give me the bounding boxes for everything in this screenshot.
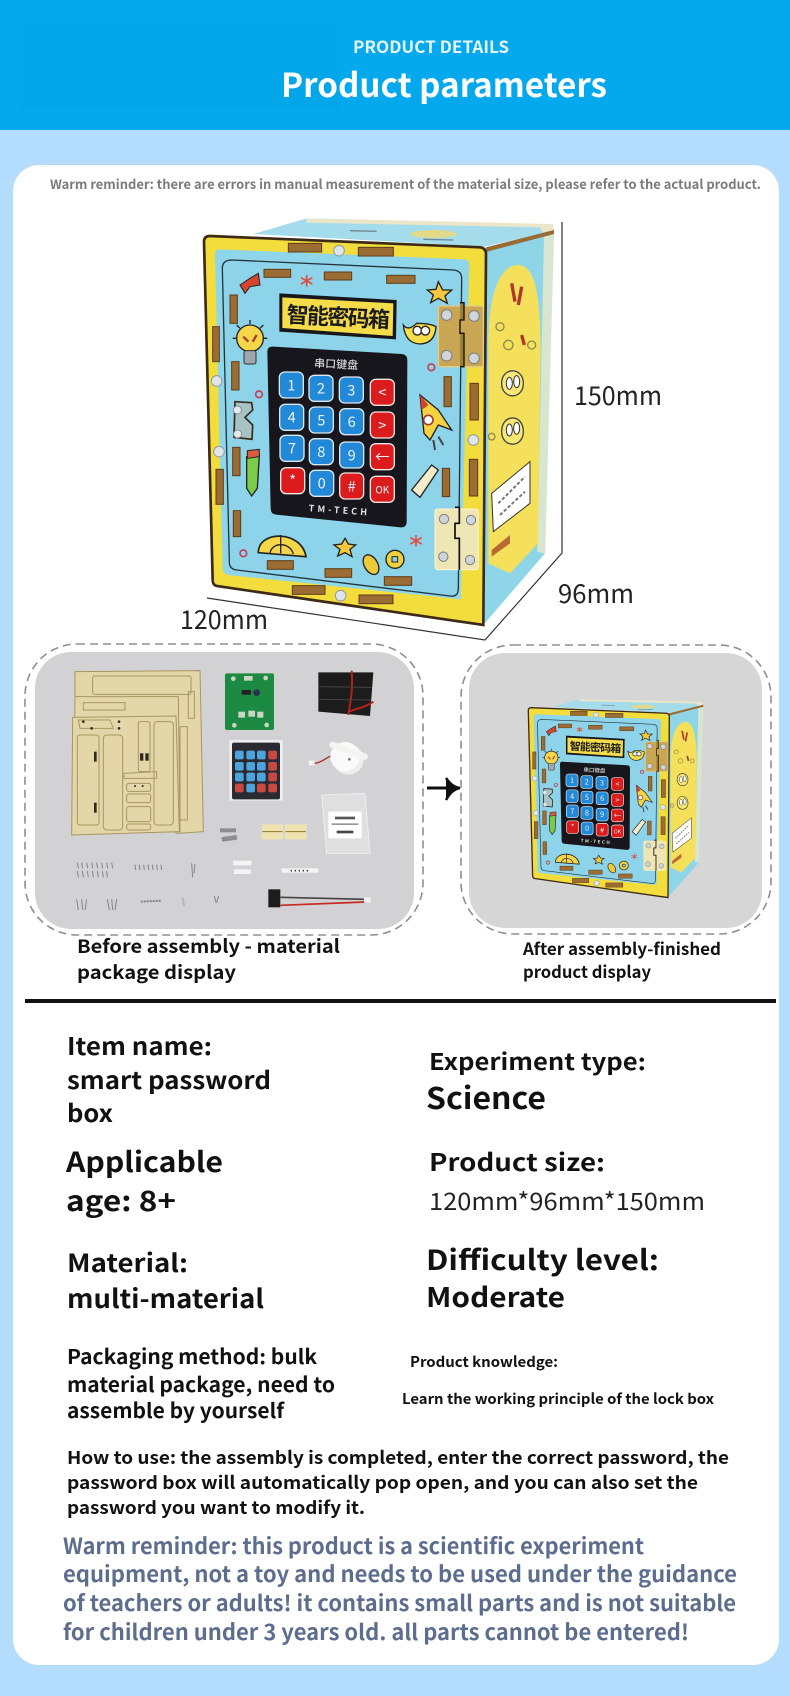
box illustration: 1 bbox=[287, 374, 295, 395]
box illustration: 9 bbox=[348, 444, 356, 465]
product photo: assembled password box with dimensions bbox=[180, 218, 662, 640]
kit parts bbox=[72, 671, 373, 910]
finished box: * bbox=[571, 823, 574, 833]
spec: product knowledge: Product knowledge: bbox=[410, 1351, 558, 1372]
finished box: 4 bbox=[570, 792, 574, 802]
finished box: 5 bbox=[585, 793, 589, 803]
caption: before assembly: Before assembly - material bbox=[77, 933, 340, 959]
spec: item name bbox=[67, 1027, 271, 1129]
warm reminder paragraph: equipment, not a toy and needs to be used under the guidance bbox=[63, 1557, 737, 1589]
width label: 120mm bbox=[180, 600, 268, 637]
micro switch and wires bbox=[268, 889, 280, 907]
warm reminder paragraph: Warm reminder: this product is a scientific experiment bbox=[63, 1529, 644, 1561]
mini keypad bbox=[229, 740, 283, 801]
spec: experiment type: Science bbox=[426, 1074, 546, 1118]
box illustration: OK bbox=[375, 481, 390, 496]
spec: difficulty level: Difficulty level: bbox=[426, 1239, 659, 1279]
finished box: 6 bbox=[600, 794, 604, 804]
spec: material: Material: bbox=[67, 1244, 188, 1280]
wooden boards bbox=[72, 671, 203, 835]
box illustration: 2 bbox=[317, 378, 325, 399]
panel: after assembly finished product photo bbox=[461, 645, 771, 934]
spec: applicable age: age: 8+ bbox=[66, 1180, 176, 1220]
finished box: 0 bbox=[585, 824, 589, 834]
dashed frame bbox=[461, 645, 771, 934]
header banner bbox=[0, 0, 790, 130]
spec: packaging method: Packaging method: bulk bbox=[67, 1340, 318, 1370]
spec: product size: Product size: bbox=[429, 1143, 605, 1178]
spec: experiment type: Experiment type: bbox=[429, 1043, 646, 1077]
spec: difficulty level: Moderate bbox=[426, 1276, 565, 1315]
box illustration: 3 bbox=[347, 379, 355, 400]
warm reminder paragraph: for children under 3 years old. all parts cannot be entered! bbox=[63, 1615, 689, 1647]
PCB board bbox=[225, 673, 274, 730]
box illustration: > bbox=[378, 414, 386, 435]
box illustration: 6 bbox=[348, 411, 356, 432]
spec: experiment type bbox=[426, 1043, 646, 1118]
caption: after assembly: After assembly-finished bbox=[522, 936, 721, 960]
depth label: 96mm bbox=[558, 574, 634, 611]
grey photo background bbox=[469, 653, 762, 928]
box illustration: < bbox=[378, 382, 386, 403]
screw bag bbox=[322, 793, 370, 853]
how to use paragraph bbox=[67, 1445, 729, 1520]
how to use paragraph: password box will automatically pop open, and you can also set the bbox=[67, 1470, 698, 1495]
section divider bbox=[25, 999, 776, 1003]
dashed frame bbox=[25, 644, 423, 935]
finished box: 8 bbox=[585, 809, 589, 819]
box illustration: 串口键盘 bbox=[314, 355, 359, 373]
box illustration bbox=[204, 218, 554, 625]
finished box: < bbox=[615, 780, 620, 790]
main title: Product parameters bbox=[281, 59, 607, 107]
spec: packaging method: material package, need to bbox=[67, 1368, 335, 1398]
spec: product size: 120mm*96mm*150mm bbox=[429, 1182, 705, 1217]
box illustration: 8 bbox=[317, 441, 325, 462]
box illustration: 0 bbox=[318, 473, 326, 494]
finished box: 智能密码箱 bbox=[569, 738, 622, 756]
finished box: ← bbox=[614, 811, 621, 821]
battery holder bbox=[318, 672, 373, 716]
box illustration: ← bbox=[375, 446, 390, 467]
warm reminder paragraph bbox=[63, 1529, 737, 1647]
finished box: 3 bbox=[600, 779, 604, 788]
finished box: # bbox=[600, 825, 604, 835]
finished box: > bbox=[615, 796, 620, 806]
height label: 150mm bbox=[574, 376, 662, 413]
box illustration: 智能密码箱 bbox=[286, 297, 391, 335]
box illustration: TM-TECH bbox=[308, 501, 367, 518]
spec: material bbox=[67, 1244, 264, 1316]
finished box: 9 bbox=[600, 810, 604, 820]
finished box: 串口键盘 bbox=[583, 766, 606, 775]
spec: applicable age bbox=[65, 1141, 223, 1220]
spec: packaging method bbox=[67, 1340, 335, 1424]
finished box: 2 bbox=[585, 778, 589, 788]
springs bbox=[220, 828, 236, 832]
spec: item name: smart password bbox=[67, 1061, 271, 1096]
finished box: TM-TECH bbox=[580, 838, 610, 846]
height dimension line bbox=[207, 222, 562, 640]
measurement warning note: Warm reminder: there are errors in manual measurement of the material size, please refer to the actual product. bbox=[50, 174, 761, 193]
spec: product size bbox=[429, 1143, 705, 1217]
caption: before assembly bbox=[77, 933, 340, 985]
arrow: before to after bbox=[427, 778, 460, 800]
spec: item name: Item name: bbox=[67, 1027, 212, 1062]
spec: product knowledge bbox=[402, 1351, 714, 1409]
finished box: OK bbox=[614, 828, 622, 835]
spec: product knowledge: Learn the working principle of the lock box bbox=[402, 1388, 714, 1409]
spec: applicable age: Applicable bbox=[65, 1141, 223, 1181]
box illustration: 4 bbox=[288, 407, 296, 428]
caption: before assembly: package display bbox=[77, 959, 236, 985]
box illustration: 5 bbox=[317, 409, 325, 430]
small hinges bbox=[262, 824, 283, 839]
spec: packaging method: assemble by yourself bbox=[67, 1394, 285, 1424]
how to use paragraph: password you want to modify it. bbox=[67, 1495, 365, 1520]
box illustration: * bbox=[289, 470, 296, 491]
spec: material: multi-material bbox=[67, 1279, 264, 1316]
panel: before assembly material package photo bbox=[25, 644, 423, 935]
header eyebrow: PRODUCT DETAILS bbox=[353, 34, 509, 58]
buzzer bbox=[310, 755, 333, 764]
finished box bbox=[528, 699, 703, 898]
warm reminder paragraph: of teachers or adults! it contains small parts and is not suitable bbox=[63, 1586, 736, 1618]
box illustration: # bbox=[348, 475, 356, 496]
finished box: 1 bbox=[570, 776, 574, 786]
caption: after assembly bbox=[522, 936, 721, 983]
how to use paragraph: How to use: the assembly is completed, enter the correct password, the bbox=[67, 1445, 729, 1470]
spec: item name: box bbox=[67, 1094, 114, 1129]
finished box: 7 bbox=[570, 807, 574, 817]
spec: difficulty level bbox=[426, 1239, 659, 1315]
screws bbox=[77, 863, 219, 910]
box illustration: 7 bbox=[288, 438, 296, 459]
caption: after assembly: product display bbox=[523, 959, 652, 983]
grey photo background bbox=[35, 652, 414, 929]
